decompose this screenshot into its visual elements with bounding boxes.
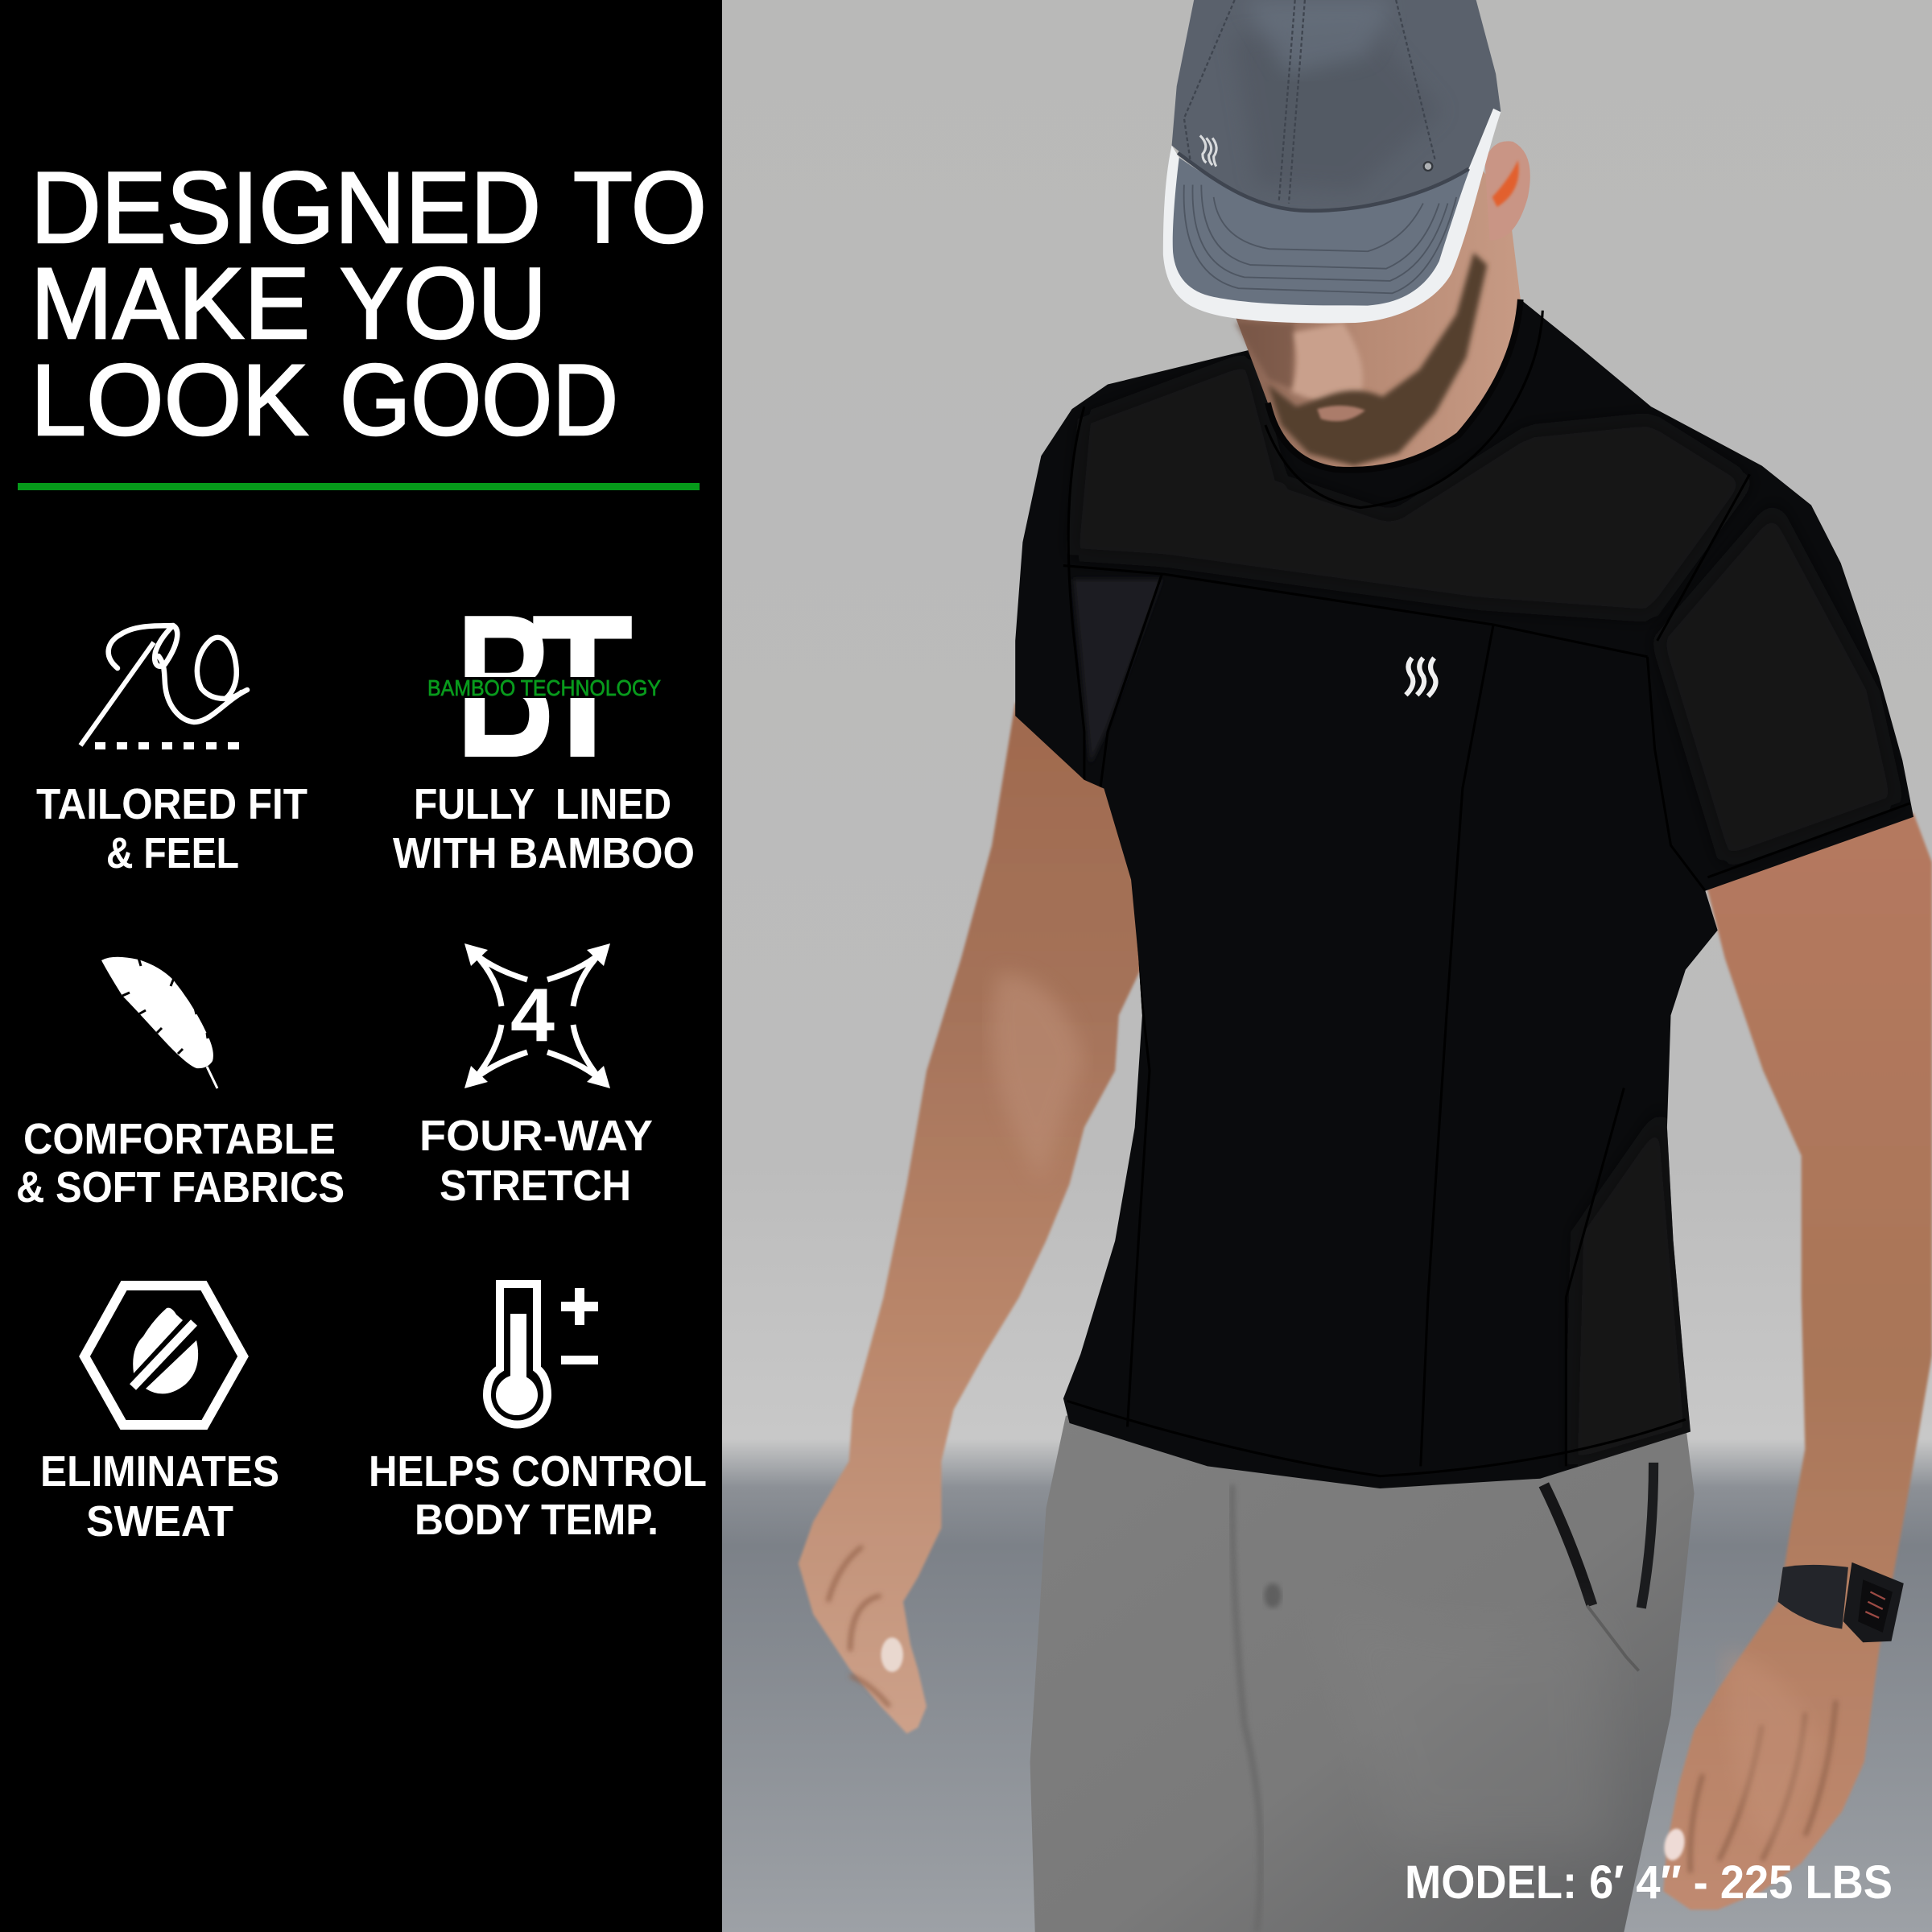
icon: four-way stretch arrows: 4: [510, 972, 555, 1057]
label: & FEEL: [106, 829, 239, 877]
label: & SOFT FABRICS: [16, 1163, 345, 1212]
label: HELPS CONTROL: [369, 1447, 707, 1496]
panel: black sidebar: [0, 0, 722, 1932]
label: [419, 1112, 653, 1210]
icon: thermometer with plus and minus: [487, 1284, 598, 1424]
feature: four-way stretch: [419, 943, 653, 1210]
icon: BT bamboo technology logo: B: [456, 572, 555, 800]
photo: model wearing black shirt, cap and grey shorts: [722, 0, 1932, 1932]
label: ELIMINATES: [40, 1447, 279, 1496]
title: YOU: [340, 248, 547, 360]
label: [16, 1115, 345, 1212]
neck and face: [1232, 160, 1542, 508]
label: STRETCH: [440, 1162, 631, 1210]
ear: [1484, 141, 1530, 241]
icon: four-way stretch arrows: [464, 943, 610, 1088]
icon: BT bamboo technology logo: [427, 572, 661, 800]
icon: BT bamboo technology logo: BAMBOO TECHNOLOGY: [427, 675, 661, 700]
feature: soft fabrics: [16, 957, 345, 1212]
feature: eliminates sweat: [40, 1286, 279, 1546]
label: FOUR-WAY: [419, 1112, 653, 1160]
label: WITH BAMBOO: [393, 829, 695, 877]
feature: body temperature control: [369, 1284, 707, 1544]
title: LOOK: [31, 345, 308, 456]
label: SWEAT: [86, 1497, 233, 1546]
grey shorts: [1030, 1416, 1695, 1932]
feature: tailored fit: [36, 625, 308, 877]
icon: crossed water drop in hexagon: [85, 1286, 243, 1425]
cap: [1163, 0, 1501, 323]
label: COMFORTABLE: [23, 1115, 336, 1163]
title: GOOD: [340, 345, 618, 456]
label: BODY TEMP.: [415, 1496, 658, 1544]
label: [393, 780, 695, 877]
smartwatch: [1778, 1563, 1904, 1642]
model caption: MODEL: 6′ 4″ - 225 LBS: [1405, 1856, 1893, 1909]
label: TAILORED FIT: [36, 780, 308, 828]
title: [31, 152, 707, 456]
title: TO: [573, 152, 707, 264]
icon: needle and thread: [80, 625, 247, 749]
label: [36, 780, 308, 877]
title: DESIGNED: [31, 152, 541, 264]
title: MAKE: [31, 248, 310, 360]
label: [369, 1447, 707, 1544]
left arm and hand: [799, 702, 1146, 1734]
icon: BT bamboo technology logo: T: [531, 572, 634, 800]
label: [40, 1447, 279, 1546]
feature: bamboo lining: [393, 572, 695, 877]
green divider: [18, 483, 700, 490]
icon: feather: [101, 957, 217, 1088]
shirt logo: [1406, 658, 1436, 696]
black t-shirt: [1015, 299, 1913, 1488]
right arm and hand: [1662, 813, 1932, 1909]
label: FULLY LINED: [414, 780, 671, 828]
